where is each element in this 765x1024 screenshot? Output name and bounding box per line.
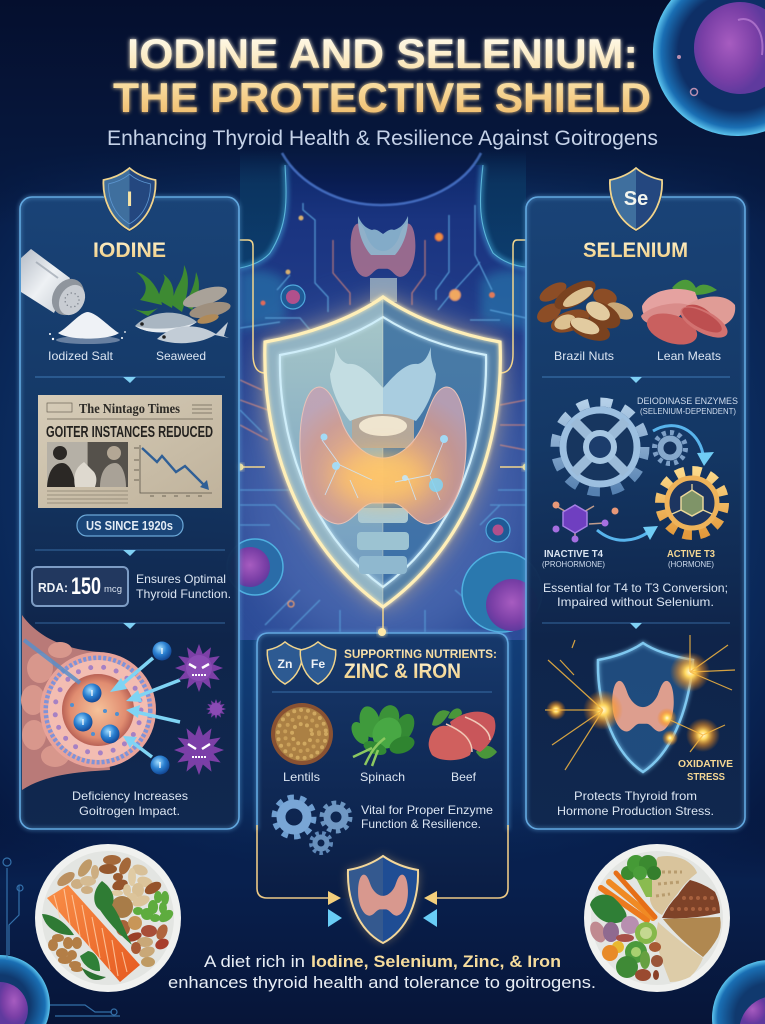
thyroid gland: [300, 387, 466, 524]
carrots: [601, 873, 655, 920]
text: deficiency: Deficiency Increases: [72, 789, 188, 803]
arrow: T4 to T3: [597, 526, 658, 540]
text: essential conversion: [543, 581, 728, 609]
text: ensures optimal: [136, 572, 231, 601]
icon: zinc shield: Zn: [278, 657, 292, 671]
masthead: The Nintago Times: [79, 401, 180, 416]
closing statement: enhances thyroid health and tolerance to goitrogens.: [168, 973, 596, 992]
icon: selenium shield: [609, 166, 663, 232]
title: IODINE AND SELENIUM:: [127, 30, 638, 77]
label: inactive T4: INACTIVE T4: [544, 548, 603, 560]
text: deiodinase enzymes: (SELENIUM-DEPENDENT): [640, 407, 736, 416]
newspaper text lines: [47, 491, 128, 503]
iodine ions: I: [161, 647, 163, 656]
goitrogen virus: [175, 644, 223, 692]
icon: salt shaker: [21, 249, 126, 344]
label: oxidative stress: [678, 758, 733, 783]
edamame: [133, 891, 175, 925]
text: ensures optimal: Thyroid Function.: [136, 587, 231, 601]
main protective shield: [265, 297, 500, 607]
icon: large gear: [555, 402, 645, 492]
heading: supporting nutrients: SUPPORTING NUTRIENTS:: [344, 647, 497, 661]
text: protects thyroid: Hormone Production Stress.: [557, 804, 714, 818]
icon: golden gear with molecule: [660, 471, 724, 535]
icon: iron shield: [300, 642, 336, 684]
text: deiodinase enzymes: DEIODINASE ENZYMES: [637, 396, 738, 407]
label: oxidative stress: STRESS: [687, 771, 725, 783]
brown beans: [662, 880, 720, 918]
arrows: blue into small shield: [193, 909, 571, 927]
label: active T3: [667, 548, 715, 569]
text: deficiency: [72, 789, 188, 818]
pill: us since 1920s: [77, 515, 183, 536]
arrows: gold into small shield: [257, 825, 508, 905]
trachea: [357, 508, 409, 574]
icon: brazil nuts: [534, 275, 636, 346]
iodine ions: I: [159, 761, 161, 770]
label: seaweed: Seaweed: [156, 349, 206, 363]
divider: [542, 623, 730, 629]
arrows into follicle: [110, 658, 180, 757]
heading: selenium: SELENIUM: [583, 239, 688, 262]
salmon: [47, 885, 140, 982]
label: inactive T4: (PROHORMONE): [542, 559, 605, 569]
closing statement: Iodine, Selenium, Zinc, & Iron: [311, 952, 561, 971]
cell: bottom right: [712, 960, 765, 1024]
label: lentils: Lentils: [283, 770, 320, 784]
text: protects thyroid: Protects Thyroid from: [574, 789, 697, 803]
subtitle: Enhancing Thyroid Health & Resilience Against Goitrogens: [107, 127, 658, 150]
icon: iodine shield: [102, 166, 157, 232]
thyroid follicle illustration: [21, 615, 226, 790]
white grain: [655, 922, 703, 982]
icon: spinach: [348, 703, 418, 766]
text: vital for enzyme: Function & Resilience.: [361, 817, 481, 831]
plate: salmon and nuts: [35, 844, 181, 992]
icon: zinc shield: [267, 642, 303, 684]
label: beef: Beef: [451, 770, 477, 784]
heading: supporting nutrients: ZINC & IRON: [344, 660, 461, 683]
iodine ions: I: [82, 718, 84, 727]
arrow: curved enzyme: [653, 426, 714, 466]
circuit lines bottom left: [3, 858, 120, 1016]
label: active T3: (HORMONE): [668, 559, 714, 569]
text: vital for enzyme: [361, 803, 493, 831]
background thyroid behind shield: [351, 216, 415, 302]
goitrogen virus: [174, 725, 224, 775]
icon: inactive T4 molecule: [552, 502, 618, 542]
cell: top right: [653, 0, 765, 136]
plate: vegetables and grains: [584, 844, 730, 992]
icon: lean meats: [641, 280, 735, 350]
iodine ions: I: [109, 730, 111, 739]
icon: iodine shield: I: [127, 188, 132, 211]
divider: [35, 377, 225, 383]
RDA badge: 150: [71, 573, 101, 600]
mixed vegetables: [587, 916, 663, 981]
heading: supporting nutrients: [344, 647, 497, 683]
RDA badge: mcg: [104, 584, 122, 595]
brown nuts: [116, 916, 170, 967]
heading: iodine: IODINE: [93, 239, 166, 262]
text: essential conversion: Essential for T4 to T3 Conversion;: [543, 581, 728, 595]
iodine ions: I: [91, 689, 93, 698]
tan grain: [663, 917, 721, 957]
text: ensures optimal: Ensures Optimal: [136, 572, 226, 586]
text: deiodinase enzymes: [637, 396, 738, 416]
icon: enzyme gears: [275, 798, 350, 853]
label: inactive T4: [542, 548, 605, 569]
title: THE PROTECTIVE SHIELD: [113, 74, 651, 121]
icon: small gear: [654, 432, 686, 464]
icon: iron shield: Fe: [311, 657, 325, 671]
text: essential conversion: Impaired without Selenium.: [557, 595, 714, 609]
broccoli: [621, 855, 661, 897]
label: brazil nuts: Brazil Nuts: [554, 349, 614, 363]
headline: GOITER INSTANCES REDUCED: [46, 424, 213, 441]
panel: supporting nutrients: [257, 628, 508, 898]
neck and body silhouette: [233, 150, 533, 650]
nuts upper: [55, 855, 163, 918]
pill: us since 1920s: US SINCE 1920s: [86, 519, 173, 533]
circuit traces around shield: [240, 203, 526, 632]
gold connectors: [236, 240, 530, 632]
iodine ions: [70, 642, 172, 774]
cell: bottom left: [0, 955, 50, 1024]
RDA badge: RDA:: [38, 580, 68, 595]
photo: [47, 442, 128, 487]
label: spinach: Spinach: [360, 770, 405, 784]
text: protects thyroid: [557, 789, 714, 818]
label: active T3: ACTIVE T3: [667, 548, 715, 560]
goitrogen virus small: [206, 699, 226, 719]
text: deficiency: Goitrogen Impact.: [79, 804, 180, 818]
text: vital for enzyme: Vital for Proper Enzyme: [361, 803, 493, 817]
icon: shield with sparks: [545, 635, 735, 772]
kale: [590, 895, 627, 923]
newspaper: [38, 395, 222, 508]
cartilage: [330, 347, 436, 421]
small thyroid shield: [348, 856, 418, 943]
node on panel: [378, 628, 386, 636]
divider: [542, 377, 730, 383]
label: lean meats: Lean Meats: [657, 349, 721, 363]
icon: beef: [429, 708, 497, 760]
icon: selenium shield: Se: [624, 188, 648, 210]
title: [113, 30, 651, 121]
label: oxidative stress: OXIDATIVE: [678, 758, 733, 770]
leaves: [42, 881, 132, 980]
divider: [35, 550, 225, 556]
panel: selenium: [526, 166, 745, 829]
walnuts: [48, 934, 83, 972]
tan beans: [650, 856, 697, 915]
closing statement: [168, 952, 596, 992]
label: iodized salt: Iodized Salt: [48, 349, 114, 363]
small cells in background: [227, 285, 542, 632]
divider: [35, 623, 225, 629]
closing statement: A diet rich in: [204, 952, 305, 971]
RDA badge: [32, 567, 128, 606]
goiter trend chart: [134, 445, 212, 496]
icon: seaweed and fish: [132, 265, 232, 343]
icon: lentils: [271, 703, 333, 765]
